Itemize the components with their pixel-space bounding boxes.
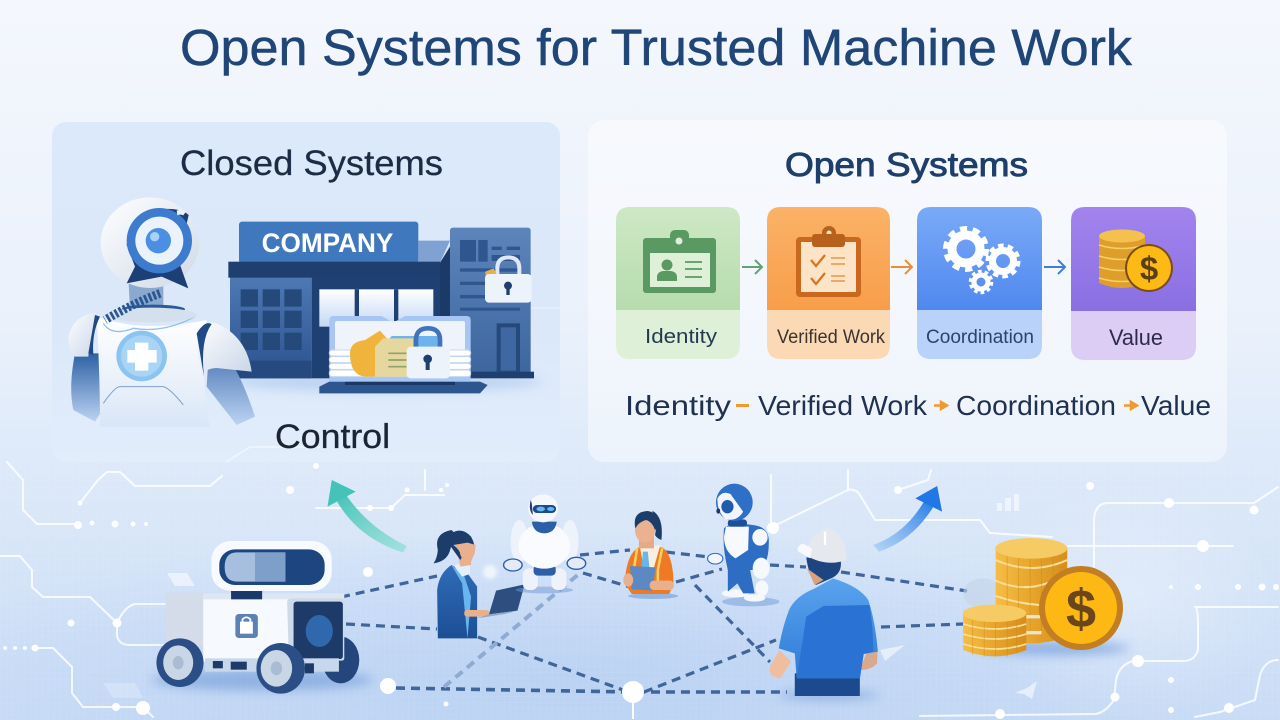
- card: coordination: Coordination: [926, 327, 1034, 348]
- illustration: woman with laptop: [434, 530, 525, 638]
- icon: coins: [1099, 230, 1173, 292]
- illustration: delivery robot vehicle: [151, 541, 373, 694]
- icon: clipboard: [796, 226, 861, 297]
- panel: closed systems: [52, 122, 560, 462]
- dollar coin: [1039, 566, 1123, 650]
- icon: tower padlock: [485, 257, 532, 303]
- illustration: white humanoid robot: [504, 494, 586, 593]
- illustration: woman in safety vest with tablet: [623, 511, 678, 599]
- illustration: worker in hard hat: [770, 528, 879, 699]
- network of dashed links: [341, 550, 967, 692]
- illustration: company building: [228, 222, 543, 392]
- card: identity: [616, 207, 740, 359]
- network hub nodes: [380, 565, 644, 719]
- icon: gears: [946, 229, 1018, 292]
- small coin stack: [963, 605, 1042, 657]
- card: verified work: [767, 207, 890, 359]
- icon: id badge: [643, 230, 716, 293]
- large coin stack: [963, 538, 1130, 655]
- flow sentence: Value: [1141, 390, 1211, 421]
- flow sentence: Identity: [625, 390, 731, 421]
- text: company sign: COMPANY: [262, 228, 393, 258]
- card: identity: Identity: [645, 326, 717, 348]
- flow sentence: Verified Work: [758, 390, 928, 421]
- flow sentence: Coordination: [956, 390, 1116, 421]
- card: coordination: [917, 207, 1042, 359]
- arrow: verified work to coordination: [891, 260, 912, 274]
- dollar coin: $: [1066, 579, 1096, 639]
- heading: closed systems: Closed Systems: [180, 144, 443, 183]
- heading: open systems: Open Systems: [785, 146, 1028, 183]
- card: verified work: Verified Work: [777, 327, 885, 348]
- illustration: robot: [68, 197, 255, 427]
- label: control: Control: [275, 418, 390, 456]
- arrow: up to open systems: [873, 486, 942, 552]
- title: Open Systems for Trusted Machine Work: [180, 19, 1133, 76]
- arrow: identity to verified work: [742, 260, 762, 274]
- arrow: up to closed systems: [327, 480, 407, 553]
- panel: open systems: [588, 120, 1227, 462]
- illustration: blue robot: [708, 484, 779, 606]
- card: value: Value: [1109, 325, 1163, 350]
- arrow: coordination to value: [1044, 260, 1065, 274]
- illustration: stacked gold coins: [963, 538, 1130, 657]
- icon: coins: $: [1140, 250, 1158, 287]
- flow sentence: [625, 390, 1211, 421]
- card: value: [1071, 207, 1196, 360]
- illustration: laptop with locked data: [319, 316, 488, 393]
